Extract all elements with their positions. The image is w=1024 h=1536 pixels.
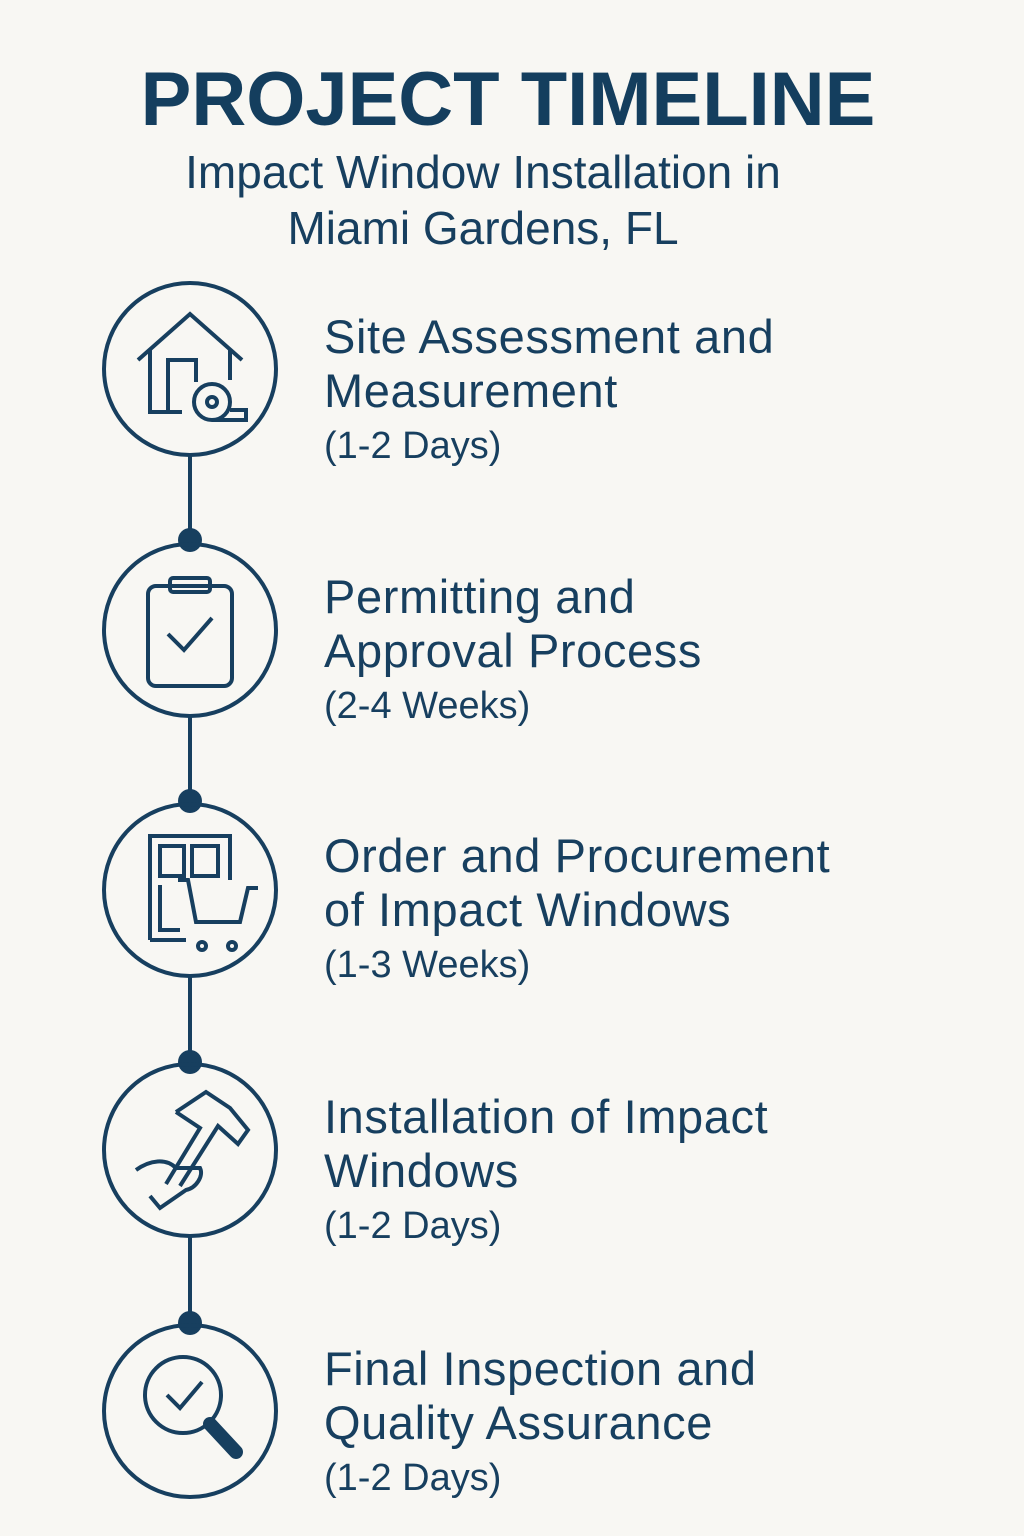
step 4 text: Windows: [324, 1144, 519, 1197]
step 4 text: [324, 1090, 768, 1247]
step 2 text: Approval Process: [324, 624, 702, 677]
icon: windows and cart: [104, 804, 276, 976]
step 5 text: [324, 1342, 757, 1499]
step 1 text: (1-2 Days): [324, 425, 501, 467]
subtitle: Impact Window Installation in: [185, 146, 781, 198]
step 4 text: (1-2 Days): [324, 1205, 501, 1247]
title: PROJECT TIMELINE: [141, 57, 875, 142]
step 2 text: (2-4 Weeks): [324, 685, 530, 727]
step 3 text: of Impact Windows: [324, 883, 731, 936]
step 4 text: Installation of Impact: [324, 1090, 768, 1143]
icon: house with tape measure: [104, 283, 276, 455]
step 2 text: Permitting and: [324, 570, 635, 623]
step 1 text: Measurement: [324, 364, 618, 417]
connector lines: [188, 455, 192, 1325]
step 2 text: [324, 570, 702, 727]
icon: magnifier check: [104, 1325, 276, 1497]
step 3 text: [324, 829, 830, 986]
step 3 text: (1-3 Weeks): [324, 944, 530, 986]
subtitle: [185, 146, 781, 254]
subtitle: Miami Gardens, FL: [287, 202, 679, 254]
step 5 text: Quality Assurance: [324, 1396, 713, 1449]
icon: hand with hammer: [104, 1064, 276, 1236]
step 5 text: Final Inspection and: [324, 1342, 757, 1395]
step 3 text: Order and Procurement: [324, 829, 830, 882]
step 1 text: [324, 310, 774, 467]
step 1 text: Site Assessment and: [324, 310, 774, 363]
step 5 text: (1-2 Days): [324, 1457, 501, 1499]
icon: clipboard check: [104, 544, 276, 716]
connector dots: [178, 528, 202, 1335]
